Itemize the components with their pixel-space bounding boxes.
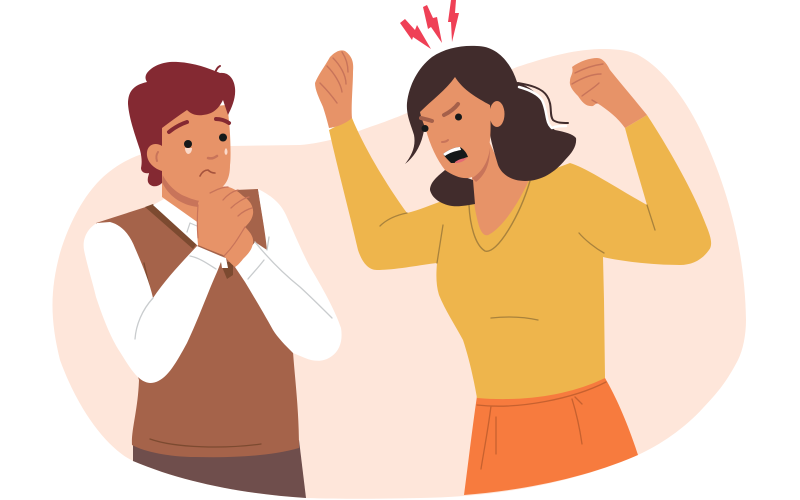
man clasped hands <box>197 186 253 267</box>
anger lightning bolts <box>400 0 459 49</box>
woman sweater <box>329 115 711 399</box>
background blob <box>52 49 746 499</box>
woman eyes <box>422 114 462 132</box>
man sleeve: left <box>84 222 223 383</box>
woman neck shadow <box>472 148 490 182</box>
woman mouth <box>443 147 468 163</box>
man face <box>160 105 231 198</box>
man nose <box>208 156 217 158</box>
woman skirt <box>464 378 638 495</box>
woman raised fist: right <box>570 58 647 128</box>
man eyebrows <box>169 119 229 132</box>
woman face <box>420 77 491 178</box>
man <box>84 62 342 498</box>
man neck shadow <box>162 172 200 207</box>
woman neckline <box>469 181 530 251</box>
man mouth <box>200 170 215 176</box>
man ear <box>147 144 162 171</box>
man hair <box>128 62 235 186</box>
woman raised fist: left <box>315 50 353 128</box>
woman ear <box>490 101 504 127</box>
man eyes <box>184 134 227 148</box>
woman lower hair lobe <box>430 170 475 206</box>
man shirt collar <box>153 199 228 268</box>
woman nose <box>442 140 448 142</box>
woman hair strand <box>518 83 568 128</box>
woman <box>315 0 711 495</box>
man trousers <box>133 440 306 498</box>
woman eyebrows <box>421 104 458 121</box>
man tears <box>185 148 228 155</box>
man neck <box>162 170 225 224</box>
man hair wisp <box>215 66 220 73</box>
man sweater vest <box>96 189 299 457</box>
man sleeve: right <box>235 189 342 361</box>
woman neck <box>472 135 530 235</box>
woman hair <box>405 46 576 181</box>
